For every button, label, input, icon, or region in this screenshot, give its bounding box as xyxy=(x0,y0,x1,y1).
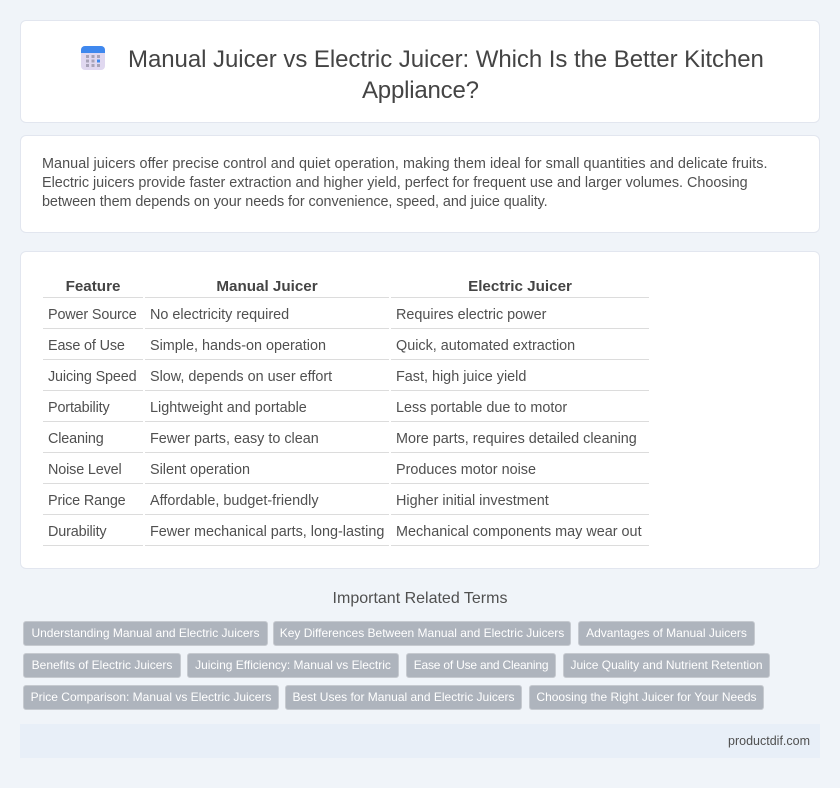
table header: Manual Juicer xyxy=(216,278,318,295)
row: durability: Durability xyxy=(48,524,106,540)
row: noise level xyxy=(48,462,536,478)
heading: related terms: Important Related Terms xyxy=(333,590,507,607)
row: portability: Less portable due to motor xyxy=(396,400,567,416)
table header xyxy=(66,278,572,295)
tag xyxy=(23,685,279,710)
row: power source: Power Source xyxy=(48,307,137,323)
tag xyxy=(23,621,268,646)
title xyxy=(128,46,764,104)
footer source text: productdif.com xyxy=(728,734,810,748)
row: ease of use: Simple, hands-on operation xyxy=(150,338,326,354)
row: durability: Mechanical components may wear out xyxy=(396,524,642,540)
intro text: Manual juicers offer precise control and quiet operation, making them ideal for small quantities and delicate fruits. xyxy=(42,156,768,172)
tag: Juicing Efficiency: Manual vs Electric xyxy=(195,658,391,672)
footer bar xyxy=(20,724,820,758)
row: price range xyxy=(48,493,549,509)
row: juicing speed: Slow, depends on user effort xyxy=(150,369,332,385)
tag xyxy=(23,653,181,678)
row: price range: Price Range xyxy=(48,493,126,509)
tag xyxy=(273,621,571,646)
row: noise level: Produces motor noise xyxy=(396,462,536,478)
row: cleaning: Fewer parts, easy to clean xyxy=(150,431,319,447)
row: cleaning: More parts, requires detailed cleaning xyxy=(396,431,637,447)
row: portability: Portability xyxy=(48,400,110,416)
tag: Best Uses for Manual and Electric Juicers xyxy=(292,690,515,704)
row: cleaning: Cleaning xyxy=(48,431,104,447)
tag: Juice Quality and Nutrient Retention xyxy=(570,658,763,672)
row: power source: Requires electric power xyxy=(396,307,546,323)
intro text: Electric juicers provide faster extraction and higher yield, perfect for frequent use and larger volumes. Choosing xyxy=(42,175,748,191)
row: juicing speed: Fast, high juice yield xyxy=(396,369,526,385)
row: portability xyxy=(48,400,567,416)
panel: introduction xyxy=(20,135,820,233)
tag: Benefits of Electric Juicers xyxy=(32,658,172,672)
row: power source: No electricity required xyxy=(150,307,289,323)
icon: calendar xyxy=(81,46,105,70)
row: durability: Fewer mechanical parts, long-lasting xyxy=(150,524,384,540)
tag xyxy=(285,685,522,710)
tag: Ease of Use and Cleaning xyxy=(414,658,548,672)
row: price range: Higher initial investment xyxy=(396,493,549,509)
table header: Feature xyxy=(66,278,120,295)
row: portability: Lightweight and portable xyxy=(150,400,307,416)
row: juicing speed xyxy=(48,369,526,385)
table header: Electric Juicer xyxy=(468,278,572,295)
title: Manual Juicer vs Electric Juicer: Which Is the Better Kitchen xyxy=(128,46,764,73)
row: price range: Affordable, budget-friendly xyxy=(150,493,319,509)
tag xyxy=(563,653,770,678)
tag xyxy=(187,653,399,678)
title: Appliance? xyxy=(362,77,479,104)
panel: comparison table xyxy=(20,251,820,569)
row: ease of use: Quick, automated extraction xyxy=(396,338,575,354)
row: ease of use: Ease of Use xyxy=(48,338,125,354)
tag: Choosing the Right Juicer for Your Needs xyxy=(536,690,757,704)
tag xyxy=(578,621,755,646)
row: cleaning xyxy=(48,431,637,447)
row: noise level: Silent operation xyxy=(150,462,250,478)
row: durability xyxy=(48,524,642,540)
tag: Advantages of Manual Juicers xyxy=(586,626,747,640)
tags: related terms xyxy=(23,621,770,710)
row: power source xyxy=(48,307,546,323)
tag xyxy=(529,685,764,710)
tag xyxy=(406,653,556,678)
intro text xyxy=(42,156,768,210)
row: juicing speed: Juicing Speed xyxy=(48,369,136,385)
row: ease of use xyxy=(48,338,575,354)
panel: title header xyxy=(20,20,820,123)
row: noise level: Noise Level xyxy=(48,462,122,478)
tag: Price Comparison: Manual vs Electric Juicers xyxy=(31,690,271,704)
intro text: between them depends on your needs for convenience, speed, and juice quality. xyxy=(42,194,548,210)
tag: Understanding Manual and Electric Juicers xyxy=(31,626,260,640)
tag: Key Differences Between Manual and Electric Juicers xyxy=(280,626,564,640)
